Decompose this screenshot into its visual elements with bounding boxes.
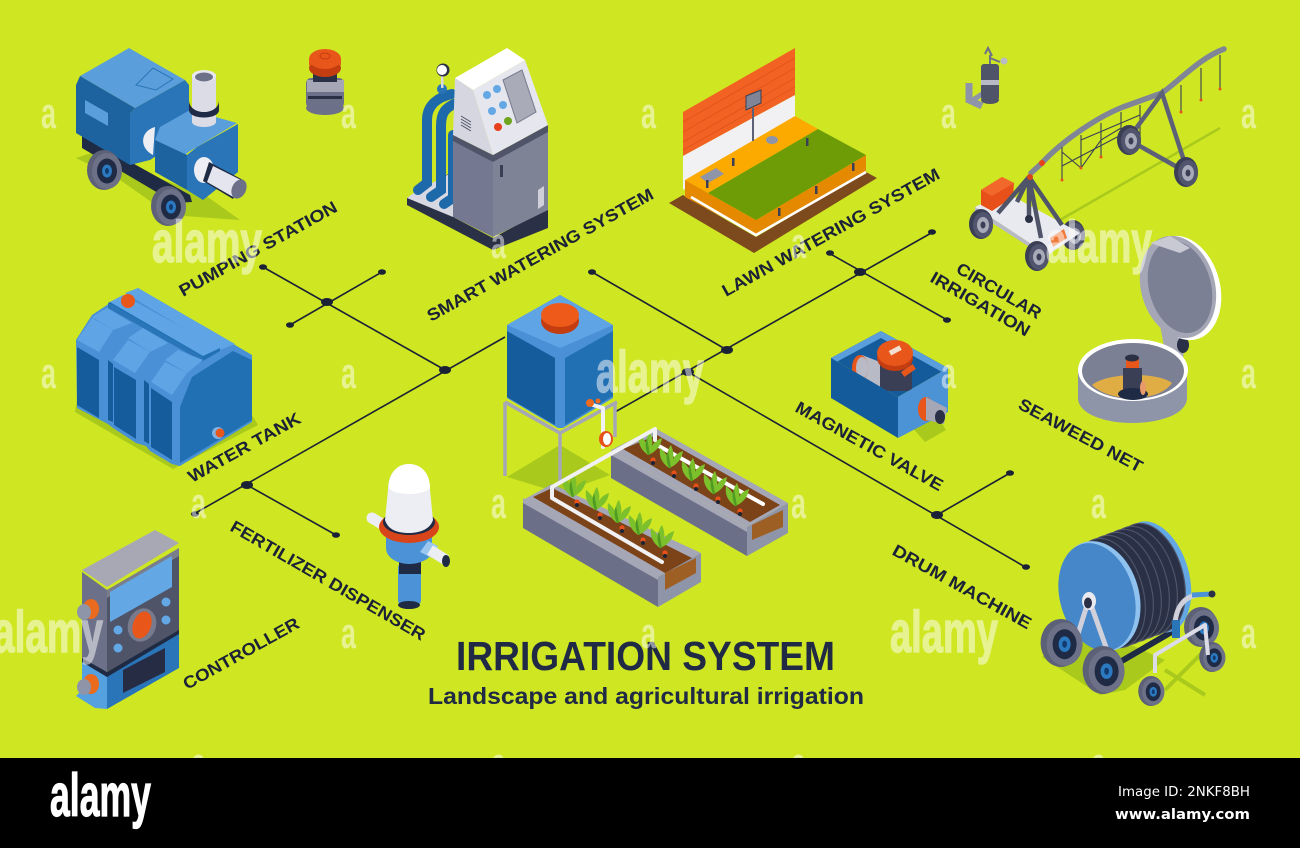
icon: pumping station	[76, 48, 250, 226]
watermark tiles	[0, 89, 1256, 788]
icon: valve cap	[306, 49, 344, 115]
label: circular: CIRCULAR	[953, 259, 1045, 323]
icon: water tank	[75, 288, 258, 469]
watermark tiles: a	[41, 349, 56, 398]
image id: Image ID: 2NKF8BH	[1118, 784, 1250, 800]
watermark tiles: a	[791, 479, 806, 528]
water tank body	[507, 295, 613, 428]
icon: smart watering system	[407, 48, 548, 250]
watermark tiles: a	[641, 89, 656, 138]
watermark tiles: a	[641, 609, 656, 658]
label: pumping station: PUMPING STATION	[176, 198, 341, 300]
label: fertilizer dispenser: FERTILIZER DISPENSER	[227, 517, 429, 644]
label: smart watering system: SMART WATERING SYSTEM	[424, 185, 657, 325]
watermark tiles: a	[341, 349, 356, 398]
subtitle: Landscape and agricultural irrigation	[428, 683, 864, 709]
icon: fertilizer dispenser	[372, 464, 450, 609]
label: irrigation: IRRIGATION	[927, 268, 1033, 340]
title: IRRIGATION SYSTEM	[456, 633, 835, 679]
icon: controller	[76, 530, 179, 709]
watermark tiles: a	[491, 479, 506, 528]
watermark tiles: a	[191, 479, 206, 528]
watermark tiles: a	[1241, 349, 1256, 398]
label: seaweed net: SEAWEED NET	[1015, 395, 1146, 477]
watermark tiles: alamy	[596, 340, 704, 405]
watermark tiles: a	[1091, 739, 1106, 788]
label: water tank: WATER TANK	[185, 408, 305, 486]
irrigation pipes	[552, 398, 662, 562]
watermark tiles: a	[341, 609, 356, 658]
watermark tiles: a	[191, 739, 206, 788]
icon: magnetic valve	[831, 331, 948, 442]
watermark tiles: a	[941, 89, 956, 138]
label: lawn watering system: LAWN WATERING SYSTEM	[719, 165, 943, 300]
watermark tiles: alamy	[890, 600, 998, 665]
label: magnetic valve: MAGNETIC VALVE	[792, 398, 946, 495]
icon: weather sensor	[969, 48, 1008, 106]
watermark tiles: a	[1241, 89, 1256, 138]
icon: seaweed net	[1078, 227, 1232, 423]
watermark tiles: a	[1091, 479, 1106, 528]
footer logo: alamy	[50, 762, 151, 829]
watermark tiles: alamy	[1046, 210, 1152, 275]
website: www.alamy.com	[1115, 807, 1250, 823]
watermark tiles: a	[341, 89, 356, 138]
connector lines	[191, 229, 1030, 570]
watermark tiles: a	[791, 219, 806, 268]
tank stand shadow	[507, 445, 610, 493]
label: controller: CONTROLLER	[180, 614, 303, 693]
icon: drum machine	[1041, 513, 1226, 706]
icon: central tank and planters	[505, 295, 788, 607]
watermark tiles: alamy	[152, 210, 262, 275]
watermark tiles: a	[491, 739, 506, 788]
right planter	[611, 428, 788, 556]
watermark tiles: a	[491, 219, 506, 268]
watermark tiles: a	[791, 739, 806, 788]
watermark tiles: a	[41, 89, 56, 138]
left planter	[523, 474, 701, 607]
footer bar	[0, 758, 1300, 848]
watermark tiles: a	[941, 349, 956, 398]
watermark tiles: a	[1241, 609, 1256, 658]
tank stand	[505, 402, 617, 482]
icon: lawn watering system	[669, 48, 877, 253]
icon: circular irrigation	[969, 49, 1224, 271]
label: drum machine: DRUM MACHINE	[889, 541, 1035, 633]
